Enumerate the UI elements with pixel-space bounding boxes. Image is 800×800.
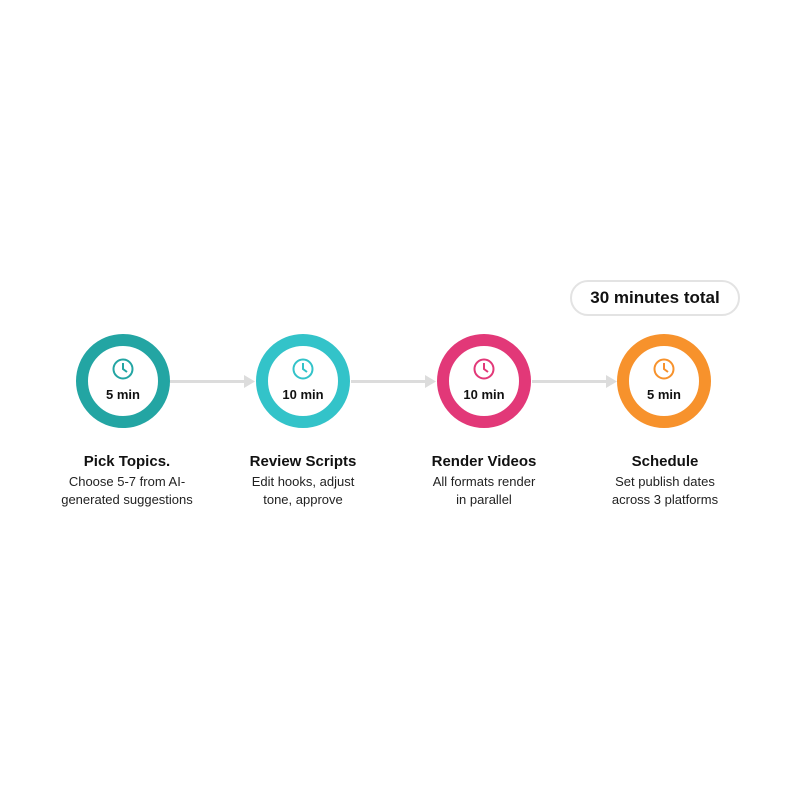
step 1 text: Pick Topics. xyxy=(84,453,170,470)
step 4 circle: 5 min xyxy=(647,387,681,402)
step 3 circle: 10 min xyxy=(463,387,505,402)
step 3 text: in parallel xyxy=(456,492,512,507)
step 2 circle xyxy=(262,340,344,422)
step 1 text: generated suggestions xyxy=(61,492,193,507)
arrow: 2 to 3 xyxy=(351,375,436,388)
arrow: 1 to 2 xyxy=(170,375,255,388)
step 2 circle: 10 min xyxy=(282,387,324,402)
step 4 text: Schedule xyxy=(632,453,698,470)
total pill: 30 minutes total xyxy=(590,288,720,307)
step 1 circle: 5 min xyxy=(106,387,140,402)
total pill xyxy=(570,280,740,316)
icon: clock xyxy=(294,360,312,378)
step 1 text: Choose 5-7 from AI- xyxy=(69,474,185,489)
step 3 text: Render Videos xyxy=(432,453,536,470)
step 2 text: tone, approve xyxy=(263,492,343,507)
icon: clock xyxy=(474,360,494,378)
icon: clock xyxy=(114,360,132,378)
step 2 text: Review Scripts xyxy=(250,453,356,470)
icon: clock xyxy=(654,360,674,378)
step 2 text: Edit hooks, adjust xyxy=(252,474,354,489)
step 4 circle xyxy=(623,340,705,422)
step 2 text xyxy=(250,453,356,507)
step 1 circle xyxy=(82,340,164,422)
step 3 circle xyxy=(443,340,525,422)
step 3 text: All formats render xyxy=(433,474,535,489)
step 4 text xyxy=(612,453,718,507)
step 1 text xyxy=(61,453,193,507)
step 3 text xyxy=(432,453,536,507)
step 4 text: Set publish dates xyxy=(615,474,715,489)
arrow: 3 to 4 xyxy=(532,375,617,388)
step 4 text: across 3 platforms xyxy=(612,492,718,507)
